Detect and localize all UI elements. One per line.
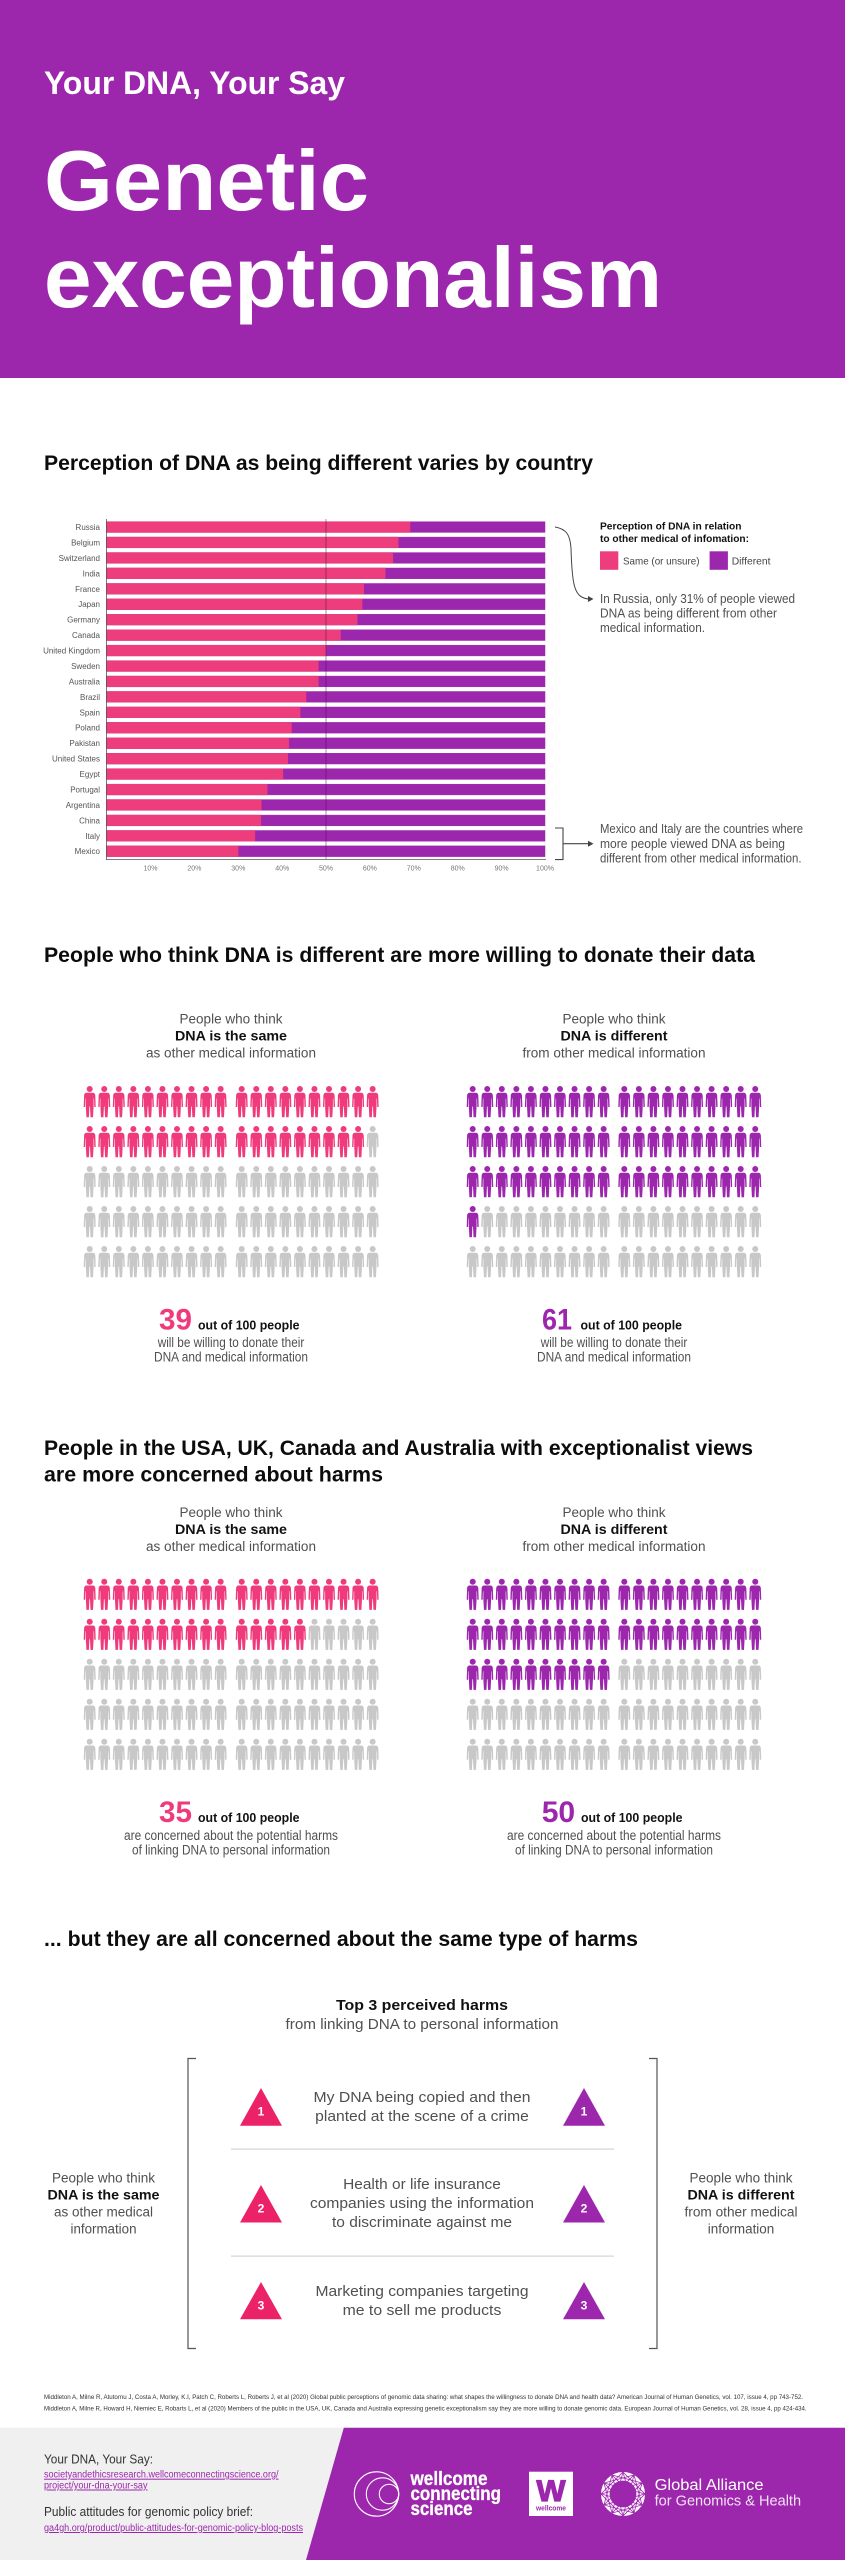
triangle: different, rank 2: 2 xyxy=(581,2202,588,2216)
stat: 35 out of 100: of linking DNA to personal information xyxy=(132,1842,330,1858)
bar: France xyxy=(75,584,545,594)
title xyxy=(44,134,662,326)
title: exceptionalism xyxy=(44,231,662,326)
label: DNA is the same: as other medical xyxy=(54,2204,153,2220)
bar: Sweden xyxy=(71,661,545,671)
label: DNA is the same: information xyxy=(70,2222,136,2236)
x axis labels: 100% xyxy=(536,866,554,872)
panel heading xyxy=(522,1505,706,1554)
bar: China xyxy=(79,815,545,826)
bar: Spain: Spain xyxy=(80,708,100,717)
bar: Japan xyxy=(78,599,545,610)
x axis labels: 50% xyxy=(319,866,333,872)
heading: same type of harms: ... but they are all concerned about the same type of harms xyxy=(44,1928,638,1951)
stat: 50 out of 100 xyxy=(507,1796,721,1858)
bar: Belgium xyxy=(71,537,545,548)
bar: Brazil xyxy=(80,692,545,702)
harms subheading: from linking DNA to personal information xyxy=(286,2016,558,2033)
logo: wellcome connecting science: wellcome xyxy=(410,2469,488,2490)
stat: 61 out of 100 xyxy=(537,1304,691,1364)
annotation: Russia: In Russia, only 31% of people viewed xyxy=(600,592,795,606)
triangle: different, rank 3: 3 xyxy=(581,2298,588,2312)
annotation: Russia xyxy=(600,592,795,635)
panel heading xyxy=(146,1505,316,1554)
references: Middleton A, Milne R, Howard H, Niemiec E, Robarts L, et al (2020) Members of the public in the USA, UK, Canada and Australia expressing genetic exceptionalism say they are more willing to donate genomic data. European Journal of Human Genetics, vol. 28, issue 4, pp 424-434. xyxy=(44,2406,807,2412)
label: DNA is different xyxy=(684,2170,798,2236)
bar: Switzerland: Switzerland xyxy=(59,554,100,563)
panel: DNA is different, harms xyxy=(467,1505,761,1858)
triangle: same, rank 3: 3 xyxy=(258,2298,265,2312)
heading: concern about harms: are more concerned about harms xyxy=(44,1464,383,1486)
x axis labels: 60% xyxy=(363,866,377,872)
triangle: different, rank 1 xyxy=(563,2088,605,2126)
logo: wellcome connecting science: science xyxy=(410,2499,472,2520)
bar: Brazil: Brazil xyxy=(80,693,100,702)
x axis labels: 30% xyxy=(231,866,245,872)
heading: perception by country: Perception of DNA as being different varies by country xyxy=(44,452,593,475)
harm 3: Marketing companies targeting xyxy=(316,2283,528,2300)
triangle: same, rank 2: 2 xyxy=(258,2202,265,2216)
stat: 39 out of 100: DNA and medical information xyxy=(154,1350,308,1364)
stat: 61 out of 100: DNA and medical information xyxy=(537,1350,691,1364)
annotation: Mexico and Italy: different from other medical information. xyxy=(600,852,802,866)
triangle: different, rank 2 xyxy=(563,2185,605,2222)
stat: 39 out of 100: out of 100 people xyxy=(198,1318,300,1332)
logo: wellcome xyxy=(529,2472,573,2516)
bar: Germany: Germany xyxy=(67,616,100,625)
panel heading: as other medical information xyxy=(146,1539,316,1554)
harm 1 xyxy=(240,2088,605,2126)
bar: Spain xyxy=(80,707,545,718)
harm 2: to discriminate against me xyxy=(332,2214,512,2231)
panel heading: DNA is the same xyxy=(175,1522,288,1537)
harm 2 xyxy=(240,2176,605,2231)
legend: Different xyxy=(732,556,771,568)
bar: Russia xyxy=(76,522,545,532)
footer: links panel: ga4gh.org/product/public-attitudes-for-genomic-policy-blog-posts xyxy=(44,2523,303,2534)
left bracket xyxy=(188,2058,196,2348)
panel heading: DNA is the same xyxy=(175,1028,288,1044)
stat: 39 out of 100: 39 xyxy=(159,1304,192,1336)
footer: links panel xyxy=(0,2428,845,2560)
label: DNA is different: from other medical xyxy=(684,2204,798,2220)
pictogram: 39 of 100 xyxy=(84,1086,379,1277)
bar: Egypt xyxy=(80,769,545,779)
logo: wellcome: wellcome xyxy=(535,2506,566,2512)
bar: Japan: Japan xyxy=(78,600,100,609)
bar: Italy: Italy xyxy=(85,832,100,841)
x axis labels: 20% xyxy=(187,866,201,872)
heading: willingness to donate: People who think DNA is different are more willing to donate their data xyxy=(44,944,755,967)
logo: wellcome: W xyxy=(536,2475,566,2508)
triangle: same, rank 3 xyxy=(240,2282,282,2319)
panel heading: DNA is different xyxy=(560,1028,668,1044)
logo: wellcome connecting science xyxy=(354,2469,501,2520)
stat: 35 out of 100: are concerned about the potential harms xyxy=(124,1828,338,1843)
bar: United Kingdom: United Kingdom xyxy=(43,646,100,656)
right bracket xyxy=(649,2058,657,2348)
x axis labels xyxy=(143,866,554,872)
legend: Same (or unsure) xyxy=(623,556,700,568)
triangle: same, rank 1: 1 xyxy=(258,2104,265,2118)
references: Middleton A, Milne R, Atutornu J, Costa A, Morley, K.I, Patch C, Roberts L, Roberts J, et al (2020) Global public perceptions of genomic data sharing: what shapes the willingness to donate DNA and health data? American Journal of Human Genetics, vol. 107, issue 4, pp 743-752. xyxy=(44,2394,803,2401)
harm 1: My DNA being copied and then xyxy=(314,2089,530,2106)
stat: 35 out of 100: 35 xyxy=(159,1796,192,1829)
bar: Mexico xyxy=(75,846,545,857)
stat: 35 out of 100: out of 100 people xyxy=(198,1810,300,1825)
header kicker: Your DNA, Your Say xyxy=(44,65,345,101)
panel heading xyxy=(522,1012,706,1060)
bar: Germany xyxy=(67,614,545,625)
harms subheading xyxy=(286,1998,558,2033)
triangle: same, rank 1 xyxy=(240,2088,282,2126)
bar: India xyxy=(83,568,545,579)
x axis labels: 80% xyxy=(451,866,465,872)
bar: Poland: Poland xyxy=(75,724,100,733)
label: DNA is the same xyxy=(48,2170,160,2236)
bar: Mexico: Mexico xyxy=(75,847,101,856)
bar: United Kingdom xyxy=(43,645,545,656)
footer: links panel: project/your-dna-your-say xyxy=(44,2480,148,2492)
panel heading: People who think xyxy=(180,1505,283,1520)
bracket arrow: Italy and Mexico xyxy=(555,828,594,860)
annotation: Mexico and Italy: Mexico and Italy are the countries where xyxy=(600,822,803,836)
bar: United States: United States xyxy=(52,755,100,764)
legend: to other medical of infomation: xyxy=(600,533,749,545)
bar: Switzerland xyxy=(59,553,545,563)
logo: Global Alliance for Genomics and Health: Global Alliance xyxy=(655,2477,764,2494)
legend: Perception of DNA in relation xyxy=(600,520,742,532)
logo: Global Alliance for Genomics and Health xyxy=(601,2472,801,2516)
bar: Argentina: Argentina xyxy=(66,801,101,810)
harm 2: Health or life insurance xyxy=(343,2176,501,2193)
bar: Portugal: Portugal xyxy=(70,786,100,794)
bar: Canada: Canada xyxy=(72,631,101,640)
panel heading: from other medical information xyxy=(522,1046,706,1060)
panel: DNA is the same, donate xyxy=(84,1012,379,1364)
panel heading: People who think xyxy=(562,1505,666,1520)
legend xyxy=(600,520,771,570)
panel: DNA is the same, harms xyxy=(84,1505,379,1858)
logo: wellcome connecting science: connecting xyxy=(410,2484,501,2505)
stat: 39 out of 100 xyxy=(154,1304,308,1364)
footer: links panel: societyandethicsresearch.wellcomeconnectingscience.org/ xyxy=(44,2470,279,2481)
stacked bar chart: perception by country xyxy=(43,519,554,872)
bar: Belgium: Belgium xyxy=(71,538,100,547)
panel heading xyxy=(146,1012,316,1060)
bar: Argentina xyxy=(66,800,545,810)
heading: concern about harms: People in the USA, UK, Canada and Australia with exceptionalist views xyxy=(44,1437,753,1460)
bar: Canada xyxy=(72,630,545,640)
bar: Portugal xyxy=(70,784,545,795)
bar: Egypt: Egypt xyxy=(80,770,101,779)
x axis labels: 70% xyxy=(407,866,421,872)
bar: Italy xyxy=(85,830,545,841)
arrow: Russia annotation xyxy=(555,527,594,602)
x axis labels: 10% xyxy=(143,866,158,872)
bar: India: India xyxy=(83,569,101,578)
annotation: Russia: medical information. xyxy=(600,621,705,635)
triangle: different, rank 1: 1 xyxy=(581,2104,588,2118)
bar: France: France xyxy=(75,585,101,594)
bar: China: China xyxy=(79,816,101,825)
annotation: Mexico and Italy xyxy=(600,822,803,866)
bar: United States xyxy=(52,753,545,764)
stat: 50 out of 100: 50 xyxy=(542,1796,575,1829)
bar: Pakistan xyxy=(69,738,545,749)
bar: Russia: Russia xyxy=(76,523,101,532)
title: Genetic xyxy=(44,134,369,229)
stat: 61 out of 100: out of 100 people xyxy=(580,1318,682,1332)
panel heading: DNA is different xyxy=(560,1522,668,1537)
logo: Global Alliance for Genomics and Health: for Genomics & Health xyxy=(655,2493,801,2510)
panel heading: People who think xyxy=(180,1012,283,1026)
label: DNA is different: People who think xyxy=(690,2170,793,2186)
panel heading: People who think xyxy=(562,1012,666,1026)
bar: Australia xyxy=(69,676,545,687)
harm 3 xyxy=(240,2282,605,2319)
panel heading: as other medical information xyxy=(146,1046,316,1060)
pictogram: 50 of 100 xyxy=(467,1579,761,1770)
references xyxy=(44,2394,807,2412)
pictogram: 61 of 100 xyxy=(467,1086,761,1277)
harms subheading: Top 3 perceived harms xyxy=(336,1998,508,2014)
stat: 50 out of 100: out of 100 people xyxy=(581,1810,682,1825)
heading: concern about harms xyxy=(44,1437,753,1486)
x axis labels: 90% xyxy=(495,866,509,872)
x axis labels: 40% xyxy=(275,866,289,872)
stat: 61 out of 100: 61 xyxy=(542,1304,572,1336)
harm 3: me to sell me products xyxy=(343,2302,501,2319)
bar: Australia: Australia xyxy=(69,677,101,686)
footer: links panel: Public attitudes for genomic policy brief: xyxy=(44,2504,253,2519)
triangle: same, rank 2 xyxy=(240,2185,282,2222)
harm 2: companies using the information xyxy=(310,2195,534,2212)
bar: Poland xyxy=(75,722,545,733)
header banner xyxy=(0,0,845,378)
stat: 39 out of 100: will be willing to donate their xyxy=(157,1335,305,1350)
stat: 50 out of 100: of linking DNA to personal information xyxy=(515,1842,713,1858)
annotation: Mexico and Italy: more people viewed DNA as being xyxy=(600,837,785,851)
panel heading: from other medical information xyxy=(522,1539,706,1554)
label: DNA is different: DNA is different xyxy=(688,2188,795,2202)
label: DNA is different: information xyxy=(708,2222,774,2236)
bar: Pakistan: Pakistan xyxy=(69,739,100,748)
stat: 61 out of 100: will be willing to donate their xyxy=(540,1335,688,1350)
bar: Sweden: Sweden xyxy=(71,662,100,671)
footer: purple logo panel xyxy=(306,2428,845,2560)
label: DNA is the same: DNA is the same xyxy=(48,2188,160,2202)
stat: 50 out of 100: are concerned about the potential harms xyxy=(507,1828,721,1843)
annotation: Russia: DNA as being different from other xyxy=(600,606,777,620)
label: DNA is the same: People who think xyxy=(52,2170,155,2186)
panel: DNA is different, donate xyxy=(467,1012,761,1364)
harm 1: planted at the scene of a crime xyxy=(315,2108,529,2125)
footer: links panel: Your DNA, Your Say: xyxy=(44,2452,153,2466)
stat: 35 out of 100 xyxy=(124,1796,338,1858)
pictogram: 35 of 100 xyxy=(84,1579,379,1770)
triangle: different, rank 3 xyxy=(563,2282,605,2319)
